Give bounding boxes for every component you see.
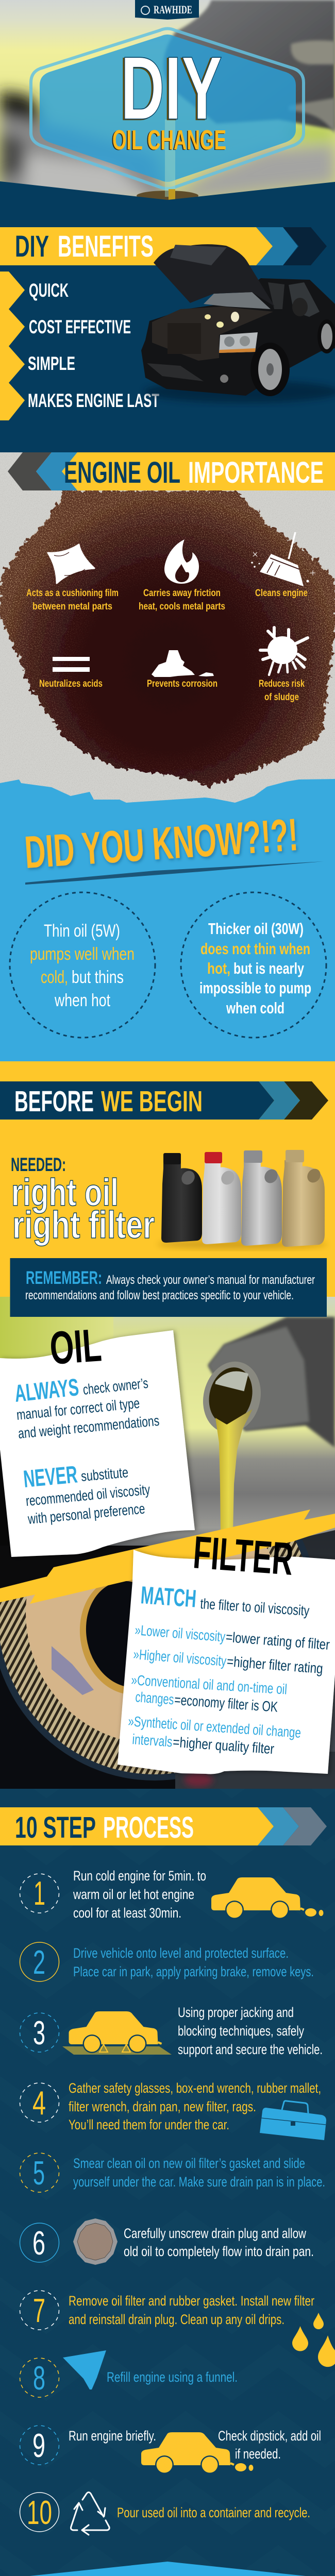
label: friction heat [139,588,225,612]
panel: remember box [10,1258,327,1317]
icon: horseshoe logo [141,6,149,14]
list: viscosity rules: intervals [132,1731,173,1750]
text: never: NEVER [22,1460,78,1493]
step 2: 2 [33,1943,45,1981]
panel: remember box: REMEMBER: [26,1268,102,1288]
benefits list [28,280,159,411]
benefits list: SIMPLE [28,353,75,374]
step 4: filter wrench, drain pan, new filter, rags. [69,2099,256,2114]
panel: oil note paper: with personal preference [27,1500,146,1527]
icon: oil drops [292,2313,335,2367]
step 4 [20,2080,326,2140]
step 6 [20,2218,314,2265]
step 4: 4 [32,2084,46,2122]
illustration: oil stain [0,489,335,799]
graphic: yellow lightning band [0,1510,335,1604]
label: cleans engine: Cleans engine [255,588,308,599]
list: viscosity rules: »Conventional oil and on-time oil [131,1672,288,1697]
panel: oil note paper [0,1319,195,1557]
step 9: Run engine briefly. [69,2428,156,2444]
panel: process background [0,1789,335,2576]
list: viscosity rules: »Lower oil viscosity [135,1622,226,1645]
icon: broom [251,532,315,586]
panel: thicker oil circle: when cold [226,999,284,1017]
label: neutralizes acids: Neutralizes acids [39,679,103,689]
text: always: ALWAYS [13,1373,80,1407]
panel: oil note paper: substitute [80,1464,129,1484]
benefits list: QUICK [29,280,69,301]
panel: do's and don'ts background [0,2562,335,2576]
label: needed: NEEDED: [11,1154,66,1175]
step 9: if needed. [235,2446,281,2462]
heading text: 10 STEP [15,1811,96,1844]
step 1: warm oil or let hot engine [73,1887,194,1902]
step 9 [20,2426,321,2474]
step 10 [20,2493,310,2535]
panel: thicker oil circle: Thicker oil (30W) [208,920,304,938]
heading: oil: OIL [48,1319,103,1375]
heading band: diy benefits [0,227,327,265]
panel: filter note paper [118,1526,335,1774]
list: viscosity rules: changes [135,1689,175,1707]
step 8: 8 [33,2359,45,2397]
step 8: Refill engine using a funnel. [107,2369,238,2385]
heading text: WE BEGIN [101,1085,203,1118]
headline: right oil right filter: right oil [11,1171,119,1214]
icon: pillow [48,545,94,583]
heading text: ENGINE OIL [64,456,180,489]
label: cushioning film: between metal parts [32,601,112,612]
icon: recycle arrows [71,2493,109,2535]
panel: thicker oil circle: but is nearly [233,959,305,977]
icon: drain plug [73,2218,118,2265]
step 10: 10 [27,2494,52,2531]
step 8 [20,2350,238,2397]
step 4: You’ll need them for under the car. [69,2117,229,2132]
headline: right oil right filter: right filter [12,1204,155,1246]
icon: toolbox [260,2101,326,2140]
step 3: Using proper jacking and [178,2005,294,2020]
logo wordmark: RAWHIDE [154,3,192,16]
panel: oil note paper: check owner’s [82,1375,149,1398]
step 7: 7 [33,2292,45,2329]
label: friction heat: heat, cools metal parts [139,601,225,612]
step 1: 1 [34,1874,45,1912]
label: cushioning film [26,588,119,612]
step 3 [20,2005,323,2057]
panel: hero photo [0,0,335,202]
label: reduces sludge: Reduces risk [259,679,305,689]
panel: thin oil circle: Thin oil (5W) [44,921,120,941]
panel: thin oil circle: cold, [41,968,68,987]
heading band: 10 step process [0,1807,327,1845]
step 2 [20,1942,314,1981]
label: reduces sludge: of sludge [264,692,299,703]
panel: before we begin background [0,1061,335,1298]
step 5: 5 [33,2154,45,2192]
panel: thin oil circle: pumps well when [30,944,135,964]
step 6: 6 [32,2224,45,2262]
label: prevents corrosion: Prevents corrosion [147,679,217,689]
panel: thin oil circle: but thins [72,968,124,987]
text: match: MATCH [140,1582,197,1613]
icon: car with exhaust [211,1877,324,1919]
step 1: cool for at least 30min. [73,1905,181,1921]
icon: car on jack stands [62,2011,172,2055]
label: friction heat: Carries away friction [143,588,221,599]
panel: thicker oil circle [181,892,326,1038]
step 9: 9 [32,2427,45,2464]
icon: flame [164,539,199,584]
label: reduces sludge [259,679,305,703]
step 7 [20,2291,335,2367]
panel: oil note paper: manual for correct oil type [16,1395,140,1423]
subtitle: oil change: OIL CHANGE [112,125,226,156]
panel: logo tab [135,0,199,20]
title: DIY: DIY [121,38,222,138]
label: cushioning film: Acts as a cushioning film [26,588,119,599]
step 3: 3 [33,2014,45,2052]
benefits list: COST EFFECTIVE [29,316,131,337]
panel: thin oil circle [10,892,155,1038]
icon: sludge splat [260,628,308,675]
graphic: yellow arrows [0,272,25,420]
panel: title hexagon [31,29,304,200]
step 1: Run cold engine for 5min. to [73,1868,206,1884]
step 5 [20,2153,325,2192]
panel: did you know background [0,779,335,1061]
list: viscosity rules: =economy filter is OK [174,1691,278,1715]
heading band: before we begin [0,1081,328,1120]
icon: funnel [63,2350,106,2389]
heading text: BEFORE [14,1085,94,1118]
benefits list: MAKES ENGINE LAST [28,390,159,411]
heading text: PROCESS [103,1811,194,1844]
panel: thicker oil circle: hot, [207,959,230,977]
panel: diy benefits background [0,181,335,452]
panel: oil note paper: recommended oil viscosity [25,1481,150,1509]
icon: running car [141,2432,254,2474]
illustration: black truck with open hood [141,244,335,403]
heading text: BENEFITS [58,230,154,263]
step 1 [20,1868,324,1921]
panel: oil note paper: and weight recommendations [18,1413,160,1442]
list: viscosity rules [128,1622,330,1757]
panel: oil pour photo [0,1297,335,1597]
list: viscosity rules: =higher quality filter [172,1734,275,1757]
list: viscosity rules: »Higher oil viscosity [133,1646,227,1669]
panel: oil filter photo [0,1530,335,1789]
panel: concrete background [0,452,335,808]
illustration: four oil bottles [157,1150,327,1249]
icon: equals sign [53,657,90,672]
heading text: DIY [15,230,49,263]
brush stroke underline [25,861,324,885]
icon: corrosion flakes [152,650,214,677]
heading band: engine oil importance [8,452,335,490]
panel: thin oil circle: when hot [54,991,110,1010]
headline: right oil right filter [11,1171,155,1246]
